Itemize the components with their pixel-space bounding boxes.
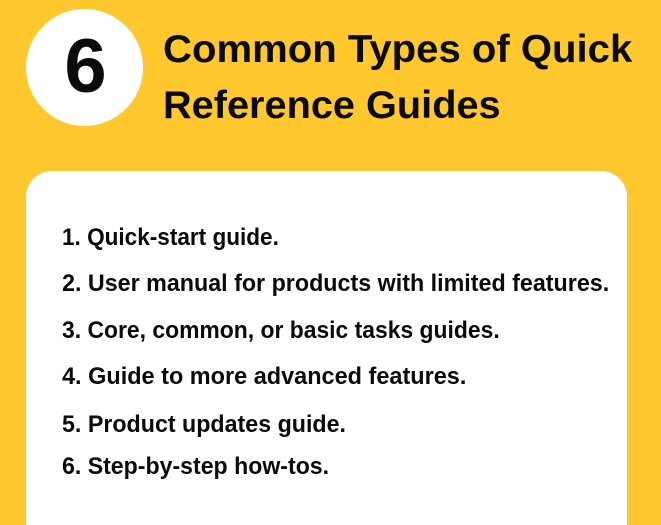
number badge (26, 9, 143, 126)
title: Reference Guides (163, 84, 501, 127)
list item 6: 6. Step-by-step how-tos. (62, 453, 329, 480)
list item 1: 1. Quick-start guide. (62, 224, 279, 251)
list item 3: 3. Core, common, or basic tasks guides. (62, 317, 500, 344)
title (163, 28, 632, 127)
list item 4: 4. Guide to more advanced features. (62, 363, 466, 390)
panel: guide list (26, 171, 627, 525)
badge number: 6 (64, 24, 107, 109)
title: Common Types of Quick (163, 28, 632, 71)
list item 5: 5. Product updates guide. (62, 411, 346, 438)
list item 2: 2. User manual for products with limited features. (62, 270, 609, 297)
